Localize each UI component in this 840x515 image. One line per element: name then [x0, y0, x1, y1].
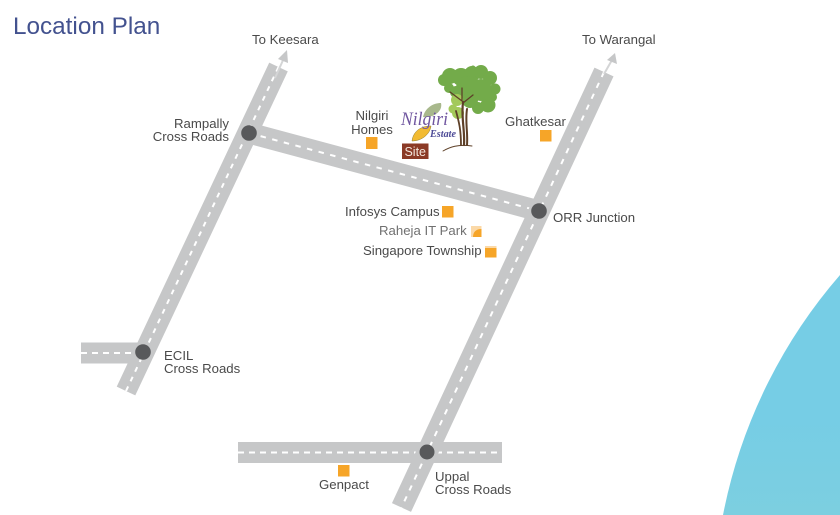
road: ECIL west branch [81, 342, 143, 364]
marker: Singapore Township [485, 246, 496, 258]
marker: Genpact [338, 465, 350, 476]
label: ORR Junction: ORR Junction [553, 210, 635, 225]
label: Ghatkesar: Ghatkesar [505, 114, 566, 129]
road: Uppal horizontal [238, 442, 502, 463]
label: Rampally Cross Roads: Cross Roads [153, 129, 229, 144]
label: Nilgiri Homes: Nilgiri [356, 108, 389, 123]
logo: Nilgiri Estate [400, 103, 456, 141]
junction: Rampally [241, 125, 257, 141]
label: Rampally Cross Roads: Rampally [174, 116, 229, 131]
junction: ECIL [135, 344, 151, 360]
site badge: Site [404, 145, 426, 159]
label: Uppal Cross Roads: Cross Roads [435, 482, 512, 497]
road: Rampally to ORR Junction [249, 133, 539, 211]
label: Nilgiri Homes: Homes [351, 122, 393, 137]
arrow: to Keesara [275, 50, 288, 78]
marker: Infosys Campus [442, 206, 454, 218]
label: Singapore Township: Singapore Township [363, 243, 482, 258]
decorative blue circle [723, 275, 840, 515]
marker: Ghatkesar [540, 130, 552, 142]
label: Infosys Campus: Infosys Campus [345, 204, 440, 219]
road: Keesara to ECIL [126, 67, 278, 391]
junction: ORR [531, 203, 547, 219]
label: ECIL Cross Roads: ECIL [164, 348, 193, 363]
icon: tree [438, 65, 500, 151]
label: To Keesara: To Keesara [252, 32, 319, 47]
label: To Warangal: To Warangal [582, 32, 656, 47]
logo script: Nilgiri: Nilgiri [400, 109, 448, 130]
icon: green leaf [423, 103, 441, 117]
title: Location Plan [13, 13, 160, 40]
label: Uppal Cross Roads: Uppal [435, 469, 470, 484]
road: Warangal to Uppal [402, 72, 604, 508]
label: Genpact: Genpact [319, 477, 369, 492]
icon: yellow leaf [412, 126, 431, 141]
label: Raheja IT Park: Raheja IT Park [379, 223, 467, 238]
label: ECIL Cross Roads: Cross Roads [164, 361, 241, 376]
marker: Raheja IT Park [471, 226, 482, 237]
logo script: Estate: Estate [429, 128, 456, 140]
junction: Uppal [420, 444, 434, 460]
marker: Nilgiri Homes [366, 137, 378, 149]
arrow: to Warangal [604, 53, 617, 74]
